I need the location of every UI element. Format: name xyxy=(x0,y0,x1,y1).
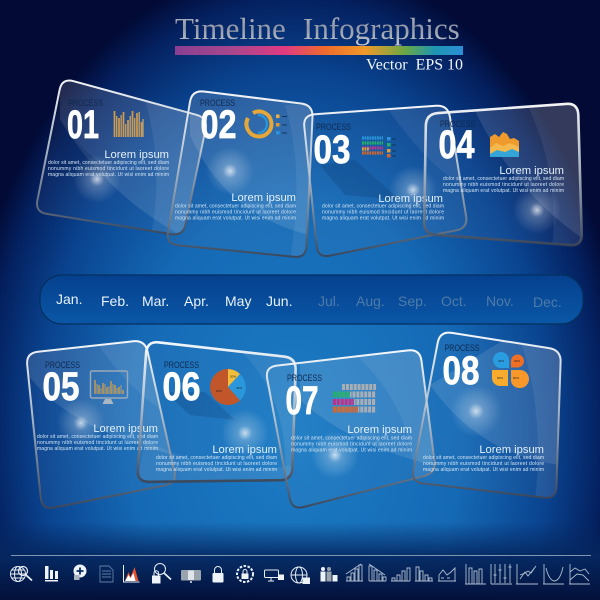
icon: axis bars xyxy=(465,564,486,584)
inactive months: Sep. xyxy=(398,293,427,309)
glass sheen xyxy=(430,342,560,497)
icon: curve chart xyxy=(543,564,564,584)
text block xyxy=(156,444,277,473)
number: 07 xyxy=(286,379,318,423)
text block: dolor sit amet, consectetuer adipiscing elit, sed diam xyxy=(48,160,169,166)
icon: small bars xyxy=(391,568,410,581)
text block: Lorem ipsum xyxy=(93,423,158,435)
people chart legend xyxy=(387,137,396,158)
text block: dolor sit amet, consectetuer adipiscing elit, sed diam xyxy=(443,176,564,182)
people grid icon xyxy=(333,387,376,410)
process label: PROCESS xyxy=(200,98,235,108)
process label: PROCESS xyxy=(68,98,103,108)
text block: nonummy nibh euismod tincidunt ut laoreet dolore xyxy=(48,166,169,172)
number: 01 xyxy=(67,103,99,147)
text block: magna aliquam erat volutpat. Ut wisi enim ad minim xyxy=(175,216,296,222)
bar chart icon xyxy=(114,111,143,137)
quadrant chart icon: 20% xyxy=(514,359,520,363)
glass sheen xyxy=(300,351,434,478)
panel: process 04 xyxy=(422,102,583,246)
active months: May xyxy=(225,293,251,309)
glass sheen xyxy=(139,354,294,480)
active months: Mar. xyxy=(142,293,169,309)
text block: magna aliquam erat volutpat. Ut wisi enim ad minim xyxy=(48,172,169,178)
panel: process 02 xyxy=(168,85,320,260)
text block xyxy=(175,192,296,222)
number: 06 xyxy=(162,365,200,409)
area chart icon xyxy=(490,132,519,157)
process label: PROCESS xyxy=(45,360,80,370)
number: 05 xyxy=(42,365,80,409)
number: 03 xyxy=(314,128,350,172)
quadrant chart icon: 40% xyxy=(498,359,504,363)
glass frame xyxy=(27,341,175,508)
rainbow bar xyxy=(175,46,463,55)
glass frame xyxy=(424,104,582,245)
text block: dolor sit amet, consectetuer adipiscing elit, sed diam xyxy=(175,204,296,210)
icon: globe search xyxy=(10,566,32,582)
text block: Lorem ipsum xyxy=(104,149,169,161)
text block: magna aliquam erat volutpat. Ut wisi enim ad minim xyxy=(443,188,564,194)
process label: PROCESS xyxy=(444,343,480,353)
text block: Lorem ipsum xyxy=(479,444,544,456)
text block: Lorem ipsum xyxy=(378,193,443,205)
icon: sliders xyxy=(491,564,512,584)
text block: Lorem ipsum xyxy=(347,424,412,436)
icon: mountain chart xyxy=(438,568,456,581)
text block: magna aliquam erat volutpat. Ut wisi enim ad minim xyxy=(37,446,158,452)
quadrant chart icon: 60% xyxy=(513,376,519,380)
inactive months xyxy=(318,293,562,310)
panel: process 07 xyxy=(267,345,440,508)
text block: magna aliquam erat volutpat. Ut wisi enim ad minim xyxy=(322,216,444,222)
glass sheen xyxy=(190,92,312,256)
icon: gear lock xyxy=(237,566,253,582)
bar track xyxy=(40,275,583,324)
inactive months: Oct. xyxy=(441,293,467,309)
icon: rising chart xyxy=(346,564,363,581)
inactive months: Jul. xyxy=(318,293,340,309)
text block: magna aliquam erat volutpat. Ut wisi enim ad minim xyxy=(291,448,412,454)
text block: Lorem ipsum xyxy=(212,444,277,456)
text block: Lorem ipsum xyxy=(231,192,296,204)
glass sheen xyxy=(28,342,170,454)
active months xyxy=(56,291,292,309)
month bar xyxy=(40,275,583,324)
monitor chart icon xyxy=(90,371,128,404)
icon row xyxy=(10,564,590,584)
icon: bars xyxy=(45,566,58,582)
glass sheen xyxy=(60,82,204,234)
text block: dolor sit amet, consectetuer adipiscing elit, sed diam xyxy=(156,455,277,461)
icon: monitor lock xyxy=(181,570,201,583)
text block: dolor sit amet, consectetuer adipiscing elit, sed diam xyxy=(423,455,544,461)
text block xyxy=(322,193,444,222)
process label: PROCESS xyxy=(316,122,351,132)
panel: process 01 xyxy=(36,80,207,236)
text block: dolor sit amet, consectetuer adipiscing elit, sed diam xyxy=(291,436,412,442)
pie chart icon: 20% xyxy=(230,374,236,378)
text block: magna aliquam erat volutpat. Ut wisi enim ad minim xyxy=(156,467,277,473)
text block xyxy=(443,165,564,194)
inactive months: Dec. xyxy=(533,294,562,310)
icon: falling bars xyxy=(415,567,433,581)
icon: area line chart xyxy=(569,564,590,584)
number: 02 xyxy=(200,103,236,147)
donut chart icon xyxy=(246,111,287,136)
process label: PROCESS xyxy=(440,119,475,129)
number: 04 xyxy=(438,123,475,167)
process label: PROCESS xyxy=(287,373,322,383)
pie chart icon: 60% xyxy=(216,389,222,393)
text block: nonummy nibh euismod tincidunt ut laoreet dolore xyxy=(156,461,277,467)
inactive months: Nov. xyxy=(486,293,514,309)
text block: nonummy nibh euismod tincidunt ut laoreet dolore xyxy=(291,442,412,448)
glass frame xyxy=(267,350,435,508)
process label: PROCESS xyxy=(164,360,199,370)
icon: peak chart xyxy=(124,565,140,582)
text block: dolor sit amet, consectetuer adipiscing elit, sed diam xyxy=(37,434,158,440)
active months: Jun. xyxy=(266,293,292,309)
text block: Lorem ipsum xyxy=(499,165,564,177)
people chart icon xyxy=(362,138,383,153)
title: Timeline xyxy=(175,11,286,46)
quadrant chart icon: 50% xyxy=(497,376,503,380)
number: 08 xyxy=(442,349,480,393)
text block: dolor sit amet, consectetuer adipiscing elit, sed diam xyxy=(322,204,444,210)
pie chart icon: 40% xyxy=(236,386,242,390)
glass frame xyxy=(168,91,313,257)
panel: process 03 xyxy=(304,100,470,256)
icon: falling chart xyxy=(369,564,386,581)
icon: add xyxy=(74,564,86,580)
glass sheen xyxy=(320,106,460,212)
inactive months: Aug. xyxy=(356,293,385,309)
text block xyxy=(291,424,412,454)
icon: lock search xyxy=(152,564,171,584)
icon: people xyxy=(320,567,338,582)
active months: Feb. xyxy=(101,293,129,309)
glass frame xyxy=(37,81,206,234)
icon: globe lock xyxy=(291,567,310,584)
panel: process 06 xyxy=(135,342,300,490)
icon: padlock xyxy=(212,566,224,582)
icon: line chart xyxy=(516,564,538,584)
panel: process 05 xyxy=(27,335,180,508)
glass frame xyxy=(304,106,466,256)
icon: document xyxy=(100,566,113,582)
pie chart icon xyxy=(210,369,246,405)
active months: Apr. xyxy=(184,293,209,309)
text block: nonummy nibh euismod tincidunt ut laoreet dolore xyxy=(443,182,564,188)
text block: nonummy nibh euismod tincidunt ut laoreet dolore xyxy=(322,210,444,216)
title: Infographics xyxy=(303,11,460,46)
text block xyxy=(48,149,169,178)
text block: nonummy nibh euismod tincidunt ut laoreet dolore xyxy=(37,440,158,446)
text block xyxy=(423,444,544,473)
glass sheen xyxy=(476,105,580,244)
panel: process 08 xyxy=(413,330,565,500)
active months: Jan. xyxy=(56,291,82,307)
icon: screen lock xyxy=(264,570,284,581)
glass frame xyxy=(138,342,296,482)
glass frame xyxy=(413,333,561,498)
text block xyxy=(37,423,158,452)
subtitle: Vector EPS 10 xyxy=(366,56,463,74)
text block: magna aliquam erat volutpat. Ut wisi enim ad minim xyxy=(423,467,544,473)
text block: nonummy nibh euismod tincidunt ut laoreet dolore xyxy=(175,210,296,216)
quadrant chart icon xyxy=(492,352,529,388)
text block: nonummy nibh euismod tincidunt ut laoreet dolore xyxy=(423,461,544,467)
